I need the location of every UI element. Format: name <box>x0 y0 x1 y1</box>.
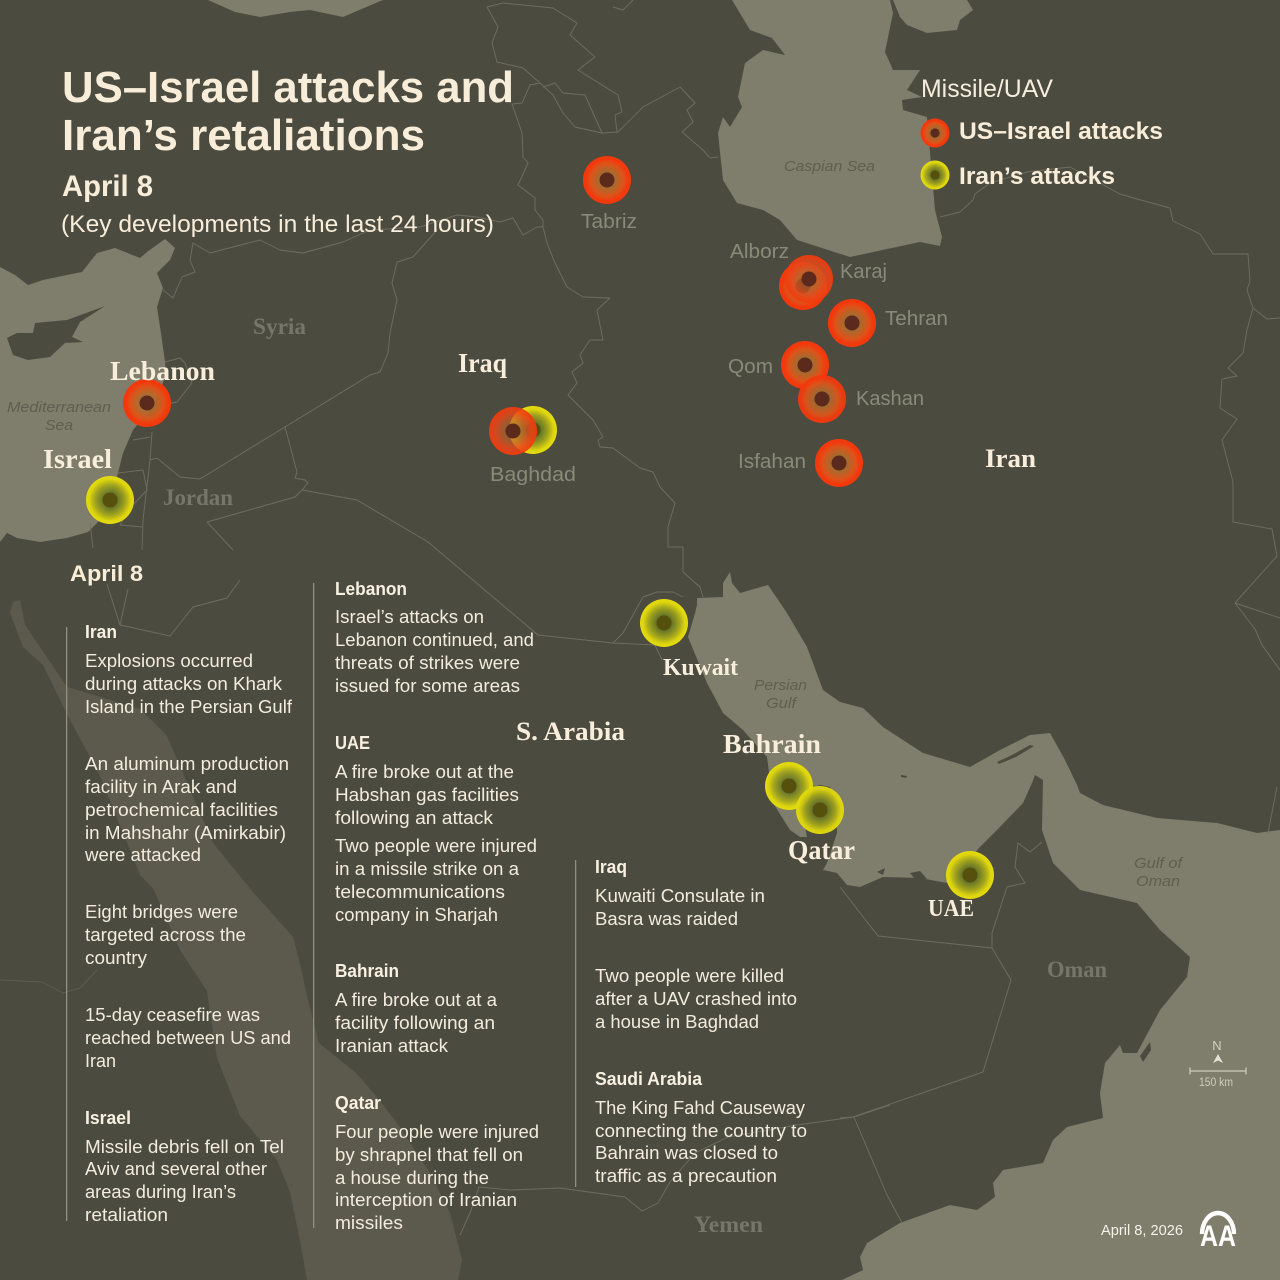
text column 1 <box>66 621 293 1225</box>
text block: Qatar <box>335 1092 539 1233</box>
bright country labels: Iran <box>985 444 1037 473</box>
bright country labels: Bahrain <box>723 729 821 759</box>
city labels: Qom <box>728 356 773 378</box>
text block: Qatar: interception of Iranian <box>335 1189 517 1210</box>
sea labels: Caspian Sea <box>784 158 875 175</box>
text block: Saudi Arabia <box>595 1068 807 1186</box>
city labels: Tabriz <box>581 211 637 233</box>
Qeshm island <box>997 745 1034 764</box>
marker: Kashan <box>798 375 846 423</box>
legend: Missile/UAV <box>921 75 1053 103</box>
northern sea <box>893 0 973 33</box>
attack markers <box>86 156 994 899</box>
Bubiyan island <box>687 600 697 614</box>
text block: Israel <box>85 1107 284 1225</box>
marker: Qatar <box>796 786 844 834</box>
text column 2 <box>313 578 539 1233</box>
text block: Bahrain: A fire broke out at a <box>335 989 498 1010</box>
Masirah island <box>1140 1042 1151 1062</box>
city labels: Baghdad <box>490 464 576 486</box>
text block: Iraq: Basra was raided <box>595 908 738 929</box>
text block: Israel: Israel <box>85 1107 131 1128</box>
legend icon: US-Israel attacks <box>920 118 950 148</box>
dim country labels: Jordan <box>163 485 233 510</box>
legend <box>920 75 1163 190</box>
text block: Bahrain: Iranian attack <box>335 1035 449 1056</box>
marker: Karaj <box>785 255 833 303</box>
scale and north arrow <box>1190 1038 1246 1089</box>
Caspian Sea <box>718 0 942 257</box>
text block: Bahrain: facility following an <box>335 1012 495 1033</box>
text block: Iran: petrochemical facilities <box>85 799 278 820</box>
marker: Bahrain <box>765 762 813 810</box>
text block: Iran: during attacks on Khark <box>85 673 283 694</box>
text block: Iran: Island in the Persian Gulf <box>85 696 293 717</box>
text block: UAE: telecommunications <box>335 881 505 902</box>
text block: Iraq: after a UAV crashed into <box>595 988 797 1009</box>
text block: Iraq: a house in Baghdad <box>595 1011 759 1032</box>
marker: Qom <box>781 341 829 389</box>
dim country labels: Syria <box>253 314 307 339</box>
text block: Qatar: Four people were injured <box>335 1121 539 1142</box>
dim country labels <box>163 314 1107 1237</box>
title: US–Israel attacks and <box>62 63 514 112</box>
text block: Israel: Aviv and several other <box>85 1158 267 1179</box>
Gulf islets <box>744 574 927 879</box>
text block: Iran: 15-day ceasefire was <box>85 1004 260 1025</box>
text block: Iran <box>84 621 293 1071</box>
section heading: April 8: April 8 <box>70 561 143 586</box>
Red Sea <box>10 600 462 1280</box>
bright country labels: Israel <box>43 444 113 474</box>
text block: Lebanon <box>335 578 534 696</box>
city labels: Isfahan <box>738 451 806 473</box>
text block: Iran: in Mahshahr (Amirkabir) <box>85 822 286 843</box>
text block: UAE: Two people were injured <box>335 835 537 856</box>
bright country labels: Kuwait <box>663 655 738 681</box>
marker: Baghdad Iran <box>509 406 557 454</box>
text block: Bahrain <box>335 960 498 1056</box>
marker: Tabriz <box>583 156 631 204</box>
text block: Iran: Iran <box>85 621 117 642</box>
sea labels: Gulf of <box>1134 855 1184 872</box>
text block: Israel: retaliation <box>85 1204 168 1225</box>
bright country labels: Lebanon <box>110 356 215 386</box>
bright country labels: Iraq <box>458 348 507 378</box>
text block: Iraq: Two people were killed <box>595 965 784 986</box>
text block: Saudi Arabia: Bahrain was closed to <box>595 1142 778 1163</box>
text block: UAE: in a missile strike on a <box>335 858 520 879</box>
city labels: Tehran <box>885 308 948 330</box>
title <box>62 63 514 160</box>
legend icon: Iran's attacks <box>920 160 950 190</box>
text block: UAE: company in Sharjah <box>335 904 498 925</box>
text block: Iran: Iran <box>85 1050 116 1071</box>
text block: Israel: Missile debris fell on Tel <box>85 1136 284 1157</box>
text block: Lebanon: Lebanon <box>335 578 407 599</box>
text block: Iran: reached between US and <box>85 1027 291 1048</box>
sea labels: Sea <box>45 417 73 434</box>
marker: Alborz <box>779 262 827 310</box>
text block: UAE: following an attack <box>335 807 494 828</box>
marker: Baghdad US-Israel <box>489 407 537 455</box>
marker: Kuwait <box>640 599 688 647</box>
scale and north arrow: N <box>1212 1038 1222 1053</box>
text block: Lebanon: Lebanon continued, and <box>335 629 534 650</box>
text block: Iran: targeted across the <box>85 924 246 945</box>
marker: Israel <box>86 476 134 524</box>
marker: Isfahan <box>815 439 863 487</box>
subtitle: note: (Key developments in the last 24 hours) <box>61 211 494 238</box>
sea labels: Persian <box>754 677 807 694</box>
city labels: Alborz <box>730 241 789 263</box>
text block: Iran: were attacked <box>84 844 201 865</box>
text block: Lebanon: issued for some areas <box>335 675 520 696</box>
dim country labels: Yemen <box>694 1212 763 1237</box>
Mediterranean Sea <box>0 239 175 542</box>
sea labels: Oman <box>1136 873 1180 890</box>
sea labels: Gulf <box>766 695 798 712</box>
text block: Qatar: missiles <box>335 1212 403 1233</box>
bright country labels: S. Arabia <box>516 717 625 746</box>
scale and north arrow: 150 km <box>1199 1077 1233 1089</box>
text block: UAE <box>335 732 537 925</box>
text block: Iran: Eight bridges were <box>85 901 238 922</box>
sea labels: Mediterranean <box>7 399 111 416</box>
text block: Qatar: by shrapnel that fell on <box>335 1144 523 1165</box>
text block: UAE: UAE <box>335 732 370 753</box>
text block: UAE: Habshan gas facilities <box>335 784 519 805</box>
bright country labels: UAE <box>928 896 974 922</box>
text block: Iran: facility in Arak and <box>85 776 237 797</box>
text block: Israel: areas during Iran’s <box>85 1181 236 1202</box>
legend text: US-Israel attacks: US–Israel attacks <box>959 118 1163 145</box>
city labels <box>490 211 948 486</box>
text block: Saudi Arabia: Saudi Arabia <box>595 1068 703 1089</box>
marker: Lebanon <box>123 379 171 427</box>
city labels: Kashan <box>856 388 924 410</box>
text block: Iran: Explosions occurred <box>85 650 253 671</box>
title: Iran’s retaliations <box>62 111 425 160</box>
dim country labels: Oman <box>1047 957 1107 982</box>
text block: Saudi Arabia: connecting the country to <box>595 1120 807 1141</box>
text block: UAE: A fire broke out at the <box>335 761 514 782</box>
marker: UAE <box>946 851 994 899</box>
text block: Qatar: Qatar <box>335 1092 381 1113</box>
text block: Lebanon: Israel’s attacks on <box>335 606 484 627</box>
legend text: Iran's attacks: Iran’s attacks <box>959 163 1115 190</box>
text block: Saudi Arabia: The King Fahd Causeway <box>595 1097 806 1118</box>
text block: Bahrain: Bahrain <box>335 960 399 981</box>
text block: Iraq <box>595 856 797 1032</box>
text block: Iran: An aluminum production <box>85 753 289 774</box>
Persian Gulf and Arabian Sea <box>688 572 1280 1280</box>
marker: Tehran <box>828 299 876 347</box>
sea labels <box>7 158 1184 890</box>
subtitle: date: April 8 <box>62 170 153 203</box>
text column 3 <box>575 856 807 1187</box>
Cyprus <box>7 306 105 360</box>
logo: Anadolu Agency: AA <box>1200 1220 1236 1253</box>
text block: Iraq: Kuwaiti Consulate in <box>595 885 765 906</box>
date stamp: April 8, 2026 <box>1101 1223 1183 1239</box>
text block: Qatar: a house during the <box>335 1167 489 1188</box>
bright country labels <box>43 348 1037 922</box>
city labels: Karaj <box>840 261 887 283</box>
text block: Lebanon: threats of strikes were <box>335 652 520 673</box>
Black Sea edge <box>208 0 383 17</box>
text block: Iran: country <box>85 947 148 968</box>
text block: Iraq: Iraq <box>595 856 627 877</box>
bright country labels: Qatar <box>788 835 855 865</box>
text block: Saudi Arabia: traffic as a precaution <box>595 1165 777 1186</box>
